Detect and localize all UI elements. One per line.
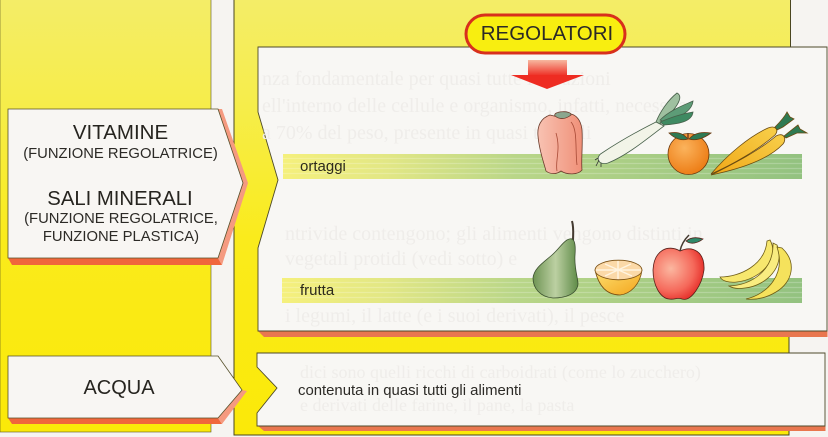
panel: acqua xyxy=(8,356,247,424)
faint show-through text from the reverse of the page: nza fondamentale per quasi tutte le reazioni xyxy=(262,68,611,90)
text: funzione regolatrice e plastica: FUNZIONE PLASTICA) xyxy=(43,229,199,245)
faint show-through text, lower xyxy=(300,362,701,415)
icon: pepper xyxy=(538,112,582,174)
faint show-through text from the reverse of the page xyxy=(262,68,703,327)
icon: arrow down xyxy=(511,60,584,89)
faint show-through text from the reverse of the page: a 70% del peso, presente in quasi tutti gli xyxy=(262,122,592,144)
heading: acqua: ACQUA xyxy=(83,377,155,399)
icon: apple xyxy=(653,235,704,299)
label: ortaggi: ortaggi xyxy=(300,158,346,175)
faint show-through text from the reverse of the page: vegetali protidi (vedi sotto) e xyxy=(285,248,517,270)
panel: vitamine e sali minerali xyxy=(8,109,248,265)
faint show-through text, lower: dici sono quelli ricchi di carboidrati (come lo zucchero) xyxy=(300,362,701,383)
heading: sali minerali: SALI MINERALI xyxy=(47,188,193,210)
bar: ortaggi xyxy=(283,154,802,179)
label pill: regolatori: REGOLATORI xyxy=(481,22,613,45)
bar: frutta xyxy=(282,278,802,303)
faint show-through text from the reverse of the page: ell'interno delle cellule e organismo, infatti, necessita xyxy=(262,95,687,117)
faint show-through text from the reverse of the page: ntrivide contengono; gli alimenti vengono distinti in xyxy=(285,223,703,245)
heading: vitamine: VITAMINE xyxy=(73,121,168,144)
icon: carrots xyxy=(711,112,807,175)
left yellow background panel xyxy=(0,0,211,432)
panel: alimenti regolatori xyxy=(258,47,828,337)
faint show-through text, lower: e derivati delle farine, il pane, la pasta xyxy=(300,395,574,415)
icon: bananas xyxy=(720,240,791,299)
panel: acqua contents xyxy=(257,353,826,431)
right yellow background panel xyxy=(234,0,790,435)
label: frutta: frutta xyxy=(300,282,335,299)
text: contenuta in quasi tutti gli alimenti: contenuta in quasi tutti gli alimenti xyxy=(298,383,522,399)
faint show-through text from the reverse of the page: i legumi, il latte (e i suoi derivati), il pesce xyxy=(285,305,624,327)
icon: orange xyxy=(668,133,711,174)
text: funzione regolatrice e plastica: (FUNZIONE REGOLATRICE, xyxy=(24,211,218,227)
icon: orange half xyxy=(595,260,642,295)
text: funzione regolatrice: (FUNZIONE REGOLATRICE) xyxy=(23,146,218,162)
label pill: regolatori xyxy=(466,15,625,53)
icon: leek xyxy=(595,93,693,167)
icon: pear xyxy=(533,221,578,298)
